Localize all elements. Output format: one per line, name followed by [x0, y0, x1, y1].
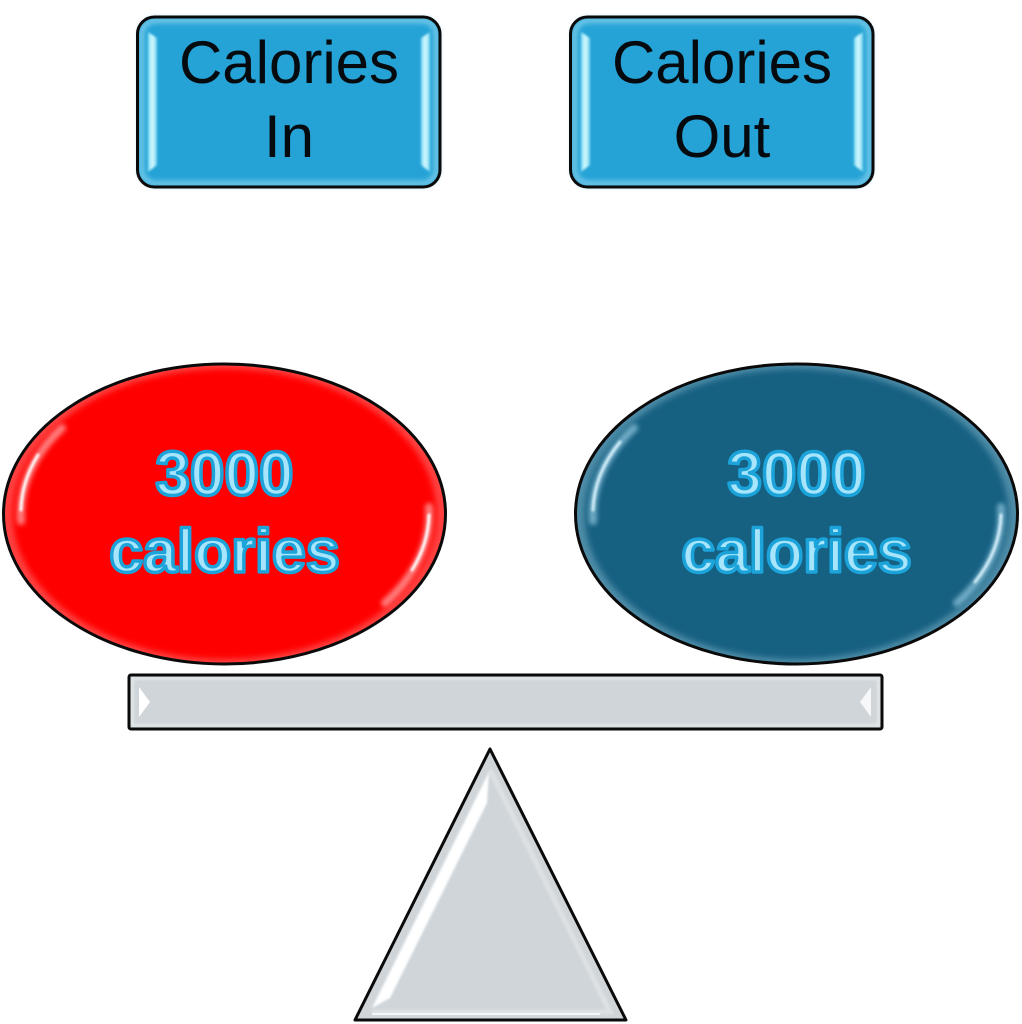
left pan: 3000 calories in: calories	[109, 517, 340, 585]
button: Calories In: Calories	[179, 29, 399, 96]
button: Calories Out: Out	[674, 103, 771, 170]
button: Calories In: In	[264, 103, 314, 170]
scale fulcrum triangle	[355, 749, 626, 1020]
button: Calories Out: Calories	[612, 29, 832, 96]
right pan: 3000 calories out: 3000	[728, 440, 865, 509]
right pan: 3000 calories out	[576, 364, 1018, 664]
left pan: 3000 calories in	[4, 364, 446, 664]
scale beam	[129, 675, 882, 729]
left pan: 3000 calories in: 3000	[156, 440, 293, 509]
button: Calories Out	[570, 17, 873, 187]
button: Calories In	[138, 17, 440, 187]
right pan: 3000 calories out: calories	[681, 517, 912, 585]
